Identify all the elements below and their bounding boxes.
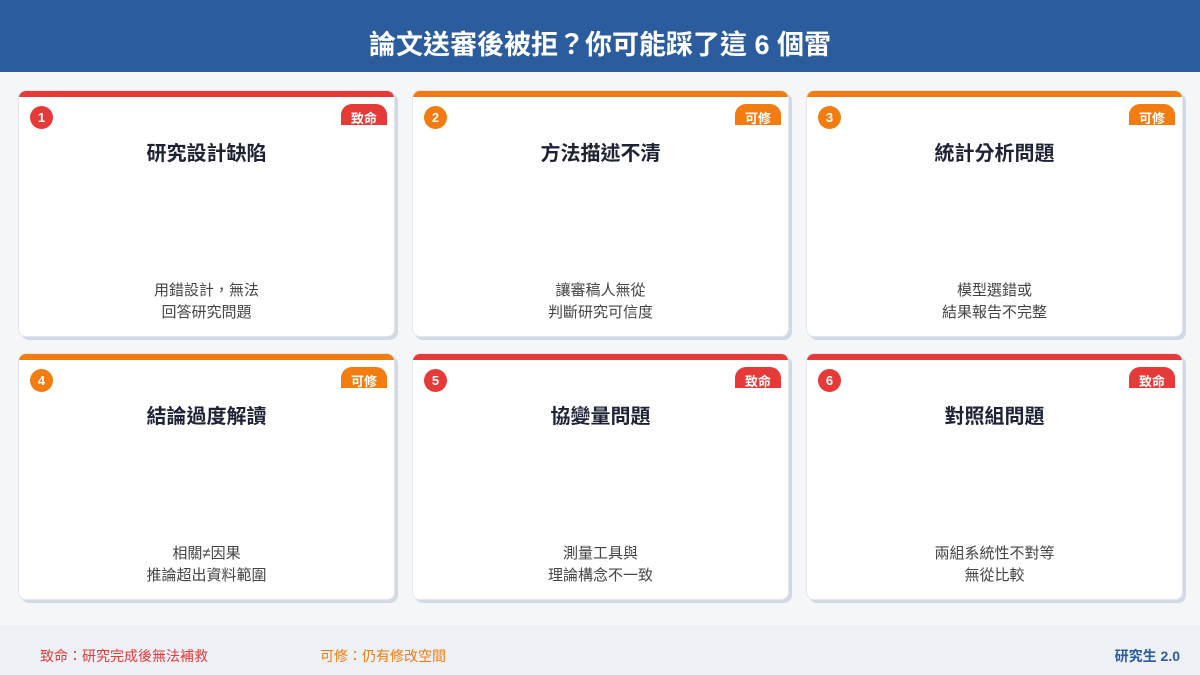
card description [548,545,653,584]
number badge 4 [30,369,53,392]
number badge 6: 6 [826,373,833,388]
card description: 理論構念不一致 [548,567,653,584]
panel: card 3 [806,90,1183,337]
number badge 3 [818,106,841,129]
panel: card 5 [412,353,789,600]
severity tag [341,367,387,388]
legend: fixable: 可修：仍有修改空間 [320,648,446,664]
number badge 3: 3 [826,110,833,125]
card description: 結果報告不完整 [942,304,1047,321]
severity tag [1129,367,1175,388]
legend: fatal: 致命：研究完成後無法補救 [40,648,208,664]
footer [0,625,1200,675]
card heading: 研究設計缺陷 [146,143,266,165]
number badge 1: 1 [38,110,45,125]
card description [154,282,259,321]
card description [548,282,653,321]
card heading: 結論過度解讀 [146,406,266,428]
card description [146,545,266,584]
severity tag [735,367,781,388]
card heading: 對照組問題 [944,406,1044,428]
card heading: 方法描述不清 [540,143,660,165]
card description: 兩組系統性不對等 [934,545,1054,562]
title: 論文送審後被拒？你可能踩了這 6 個雷 [369,30,831,60]
card description: 模型選錯或 [957,282,1032,299]
number badge 6 [818,369,841,392]
panel: card 1 [18,90,395,337]
card description: 測量工具與 [563,545,638,562]
card heading: 統計分析問題 [934,143,1054,165]
card description: 推論超出資料範圍 [146,567,266,584]
number badge 5: 5 [432,373,439,388]
panel: card 6 [806,353,1183,600]
card description: 判斷研究可信度 [548,304,653,321]
card description [934,545,1054,584]
number badge 1 [30,106,53,129]
number badge 5 [424,369,447,392]
card description: 用錯設計，無法 [154,282,259,299]
card heading: 協變量問題 [550,406,650,428]
card description: 讓審稿人無從 [555,282,646,299]
severity tag [341,104,387,125]
brand: 研究生 2.0 [1115,648,1180,664]
card description: 相關≠因果 [172,545,241,562]
card description: 無從比較 [964,567,1024,584]
panel: card 4 [18,353,395,600]
number badge 2 [424,106,447,129]
severity tag [1129,104,1175,125]
severity tag [735,104,781,125]
card description: 回答研究問題 [161,304,252,321]
title [0,0,1200,72]
card description [942,282,1047,321]
panel: card 2 [412,90,789,337]
number badge 2: 2 [432,110,439,125]
number badge 4: 4 [38,373,45,388]
